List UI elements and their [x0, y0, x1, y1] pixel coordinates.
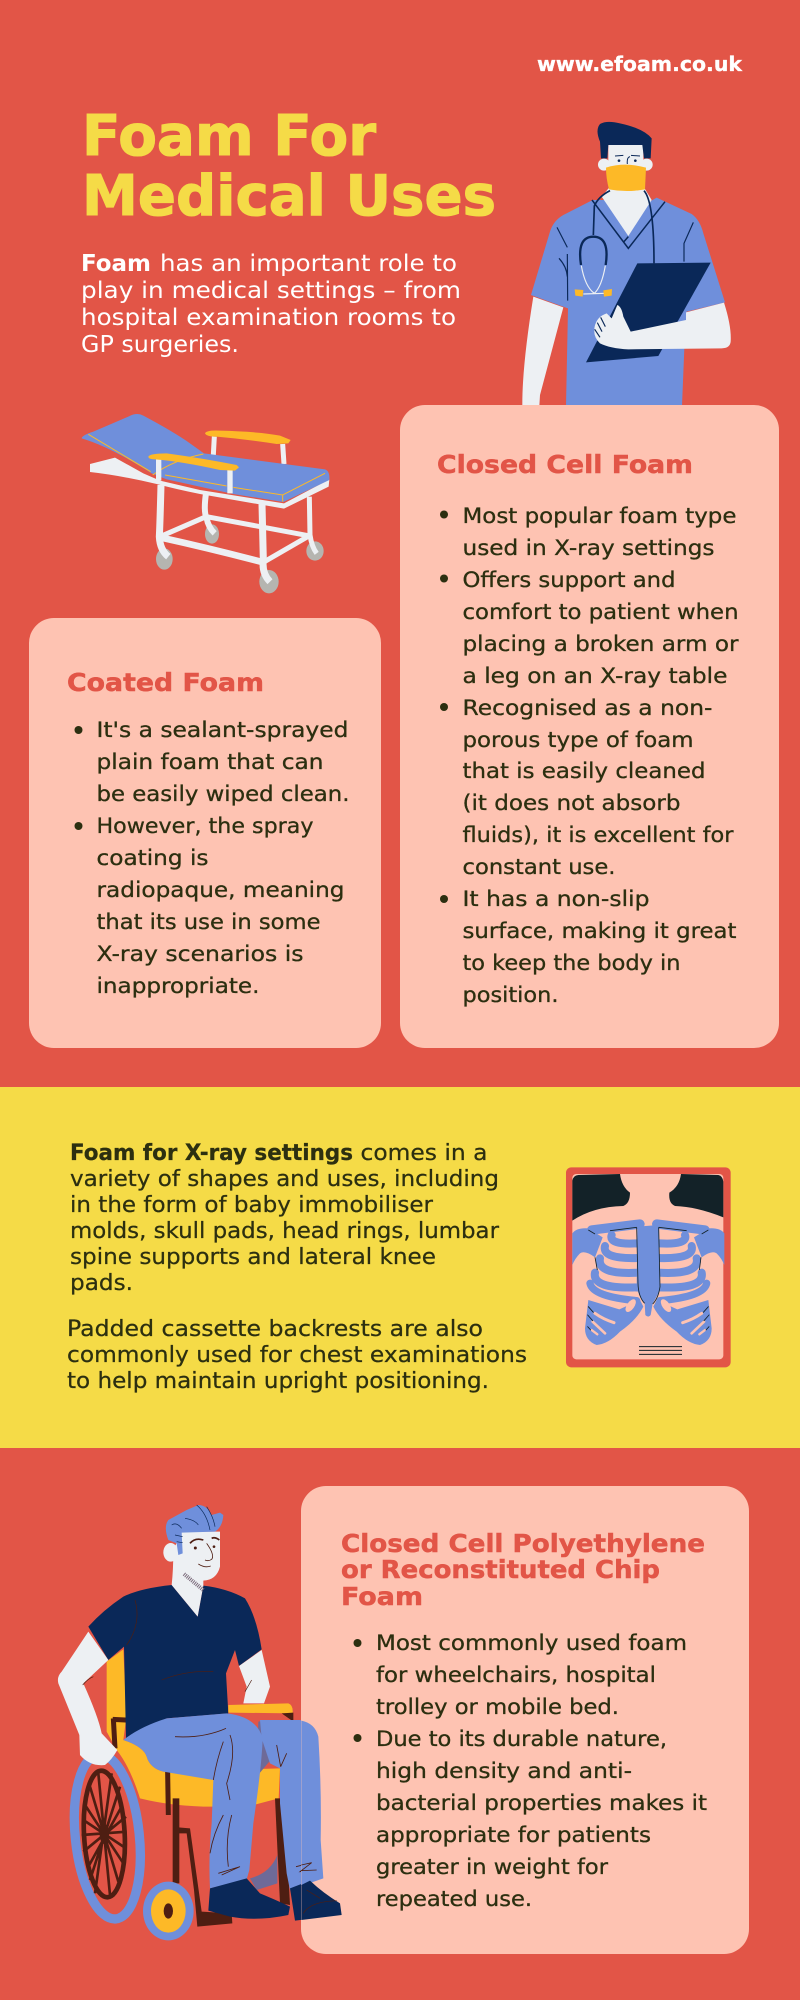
bullet list: polyethylene foam: for wheelchairs, hospital: [376, 1663, 656, 1687]
bullet list: polyethylene foam: bacterial properties makes it: [376, 1791, 707, 1815]
bullet list: polyethylene foam: repeated use.: [376, 1887, 532, 1911]
text: foam for x-ray settings: comes in a: [360, 1141, 488, 1166]
bullet list: closed cell foam: comfort to patient when: [462, 600, 738, 624]
icon: hospital trolley bed: [82, 414, 329, 593]
icon: doctor with clipboard: [522, 122, 731, 406]
intro text: [81, 251, 461, 358]
bullet list: closed cell foam: (it does not absorb: [462, 791, 680, 815]
intro text: play in medical settings – from: [81, 278, 461, 304]
bullet list: coated foam: radiopaque, meaning: [96, 878, 344, 902]
text: padded cassette backrests: commonly used for chest examinations: [67, 1343, 527, 1368]
text: foam for x-ray settings: pads.: [70, 1271, 133, 1296]
bullet list: closed cell foam: Most popular foam type: [462, 504, 736, 528]
text: foam for x-ray settings: Foam for X-ray settings: [70, 1141, 353, 1166]
bullet list: coated foam: It's a sealant-sprayed: [96, 718, 348, 742]
title: Foam For: [82, 104, 376, 169]
text: padded cassette backrests: [67, 1317, 527, 1394]
intro text: has an important role to: [160, 251, 457, 277]
panel: closed cell foam: [400, 405, 779, 1048]
bullet list: closed cell foam: position.: [462, 983, 558, 1007]
heading: closed cell foam: Closed Cell Foam: [437, 450, 693, 479]
text: foam for x-ray settings: in the form of baby immobiliser: [70, 1193, 434, 1218]
heading: coated foam: Coated Foam: [67, 668, 264, 697]
bullet list: closed cell foam: Offers support and: [462, 568, 676, 592]
bullet list: closed cell foam: constant use.: [462, 855, 616, 879]
icon: man in wheelchair: [58, 1505, 342, 1940]
title: Medical Uses: [82, 164, 496, 229]
bullet list: polyethylene foam: appropriate for patients: [376, 1823, 651, 1847]
title: [82, 104, 496, 229]
heading: closed cell polyethylene or reconstituted chip foam: or Reconstituted Chip: [341, 1555, 660, 1584]
text: foam for x-ray settings: molds, skull pads, head rings, lumbar: [70, 1219, 500, 1244]
icon: wheelchair user foot overlapping panel: [301, 1721, 342, 1920]
heading: closed cell polyethylene or reconstituted chip foam: Foam: [341, 1582, 423, 1611]
heading: closed cell polyethylene or reconstituted chip foam: [341, 1529, 705, 1611]
bullet list: polyethylene foam: trolley or mobile bed.: [376, 1695, 619, 1719]
bullet list: closed cell foam: a leg on an X-ray table: [462, 664, 728, 688]
bullet list: closed cell foam: that is easily cleaned: [462, 759, 706, 783]
bullet list: coated foam: be easily wiped clean.: [96, 782, 350, 806]
intro text: Foam: [81, 251, 151, 277]
bullet list: polyethylene foam: [354, 1631, 707, 1911]
intro text: hospital examination rooms to: [81, 305, 456, 331]
bullet list: closed cell foam: Recognised as a non-: [462, 696, 712, 720]
bullet list: coated foam: plain foam that can: [96, 750, 324, 774]
bullet list: closed cell foam: surface, making it great: [462, 919, 736, 943]
bullet list: coated foam: X-ray scenarios is: [96, 942, 304, 966]
bullet list: closed cell foam: used in X-ray settings: [462, 536, 714, 560]
bullet list: closed cell foam: to keep the body in: [462, 951, 680, 975]
bullet list: polyethylene foam: Due to its durable nature,: [376, 1727, 667, 1751]
bullet list: coated foam: [74, 718, 350, 998]
bullet list: coated foam: coating is: [96, 846, 208, 870]
panel: closed cell polyethylene foam: [301, 1486, 749, 1954]
website url: www.efoam.co.uk: [537, 52, 743, 76]
bullet list: closed cell foam: placing a broken arm or: [462, 632, 739, 656]
heading: closed cell polyethylene or reconstituted chip foam: Closed Cell Polyethylene: [341, 1529, 705, 1558]
text: padded cassette backrests: to help maintain upright positioning.: [67, 1369, 489, 1394]
bullet list: closed cell foam: fluids), it is excellent for: [462, 823, 734, 847]
bullet list: closed cell foam: [440, 504, 739, 1007]
bullet list: polyethylene foam: Most commonly used foam: [376, 1631, 687, 1655]
bullet list: closed cell foam: porous type of foam: [462, 728, 694, 752]
text: foam for x-ray settings: spine supports and lateral knee: [70, 1245, 436, 1270]
bullet list: polyethylene foam: greater in weight for: [376, 1855, 608, 1879]
icon: chest x-ray: [566, 1167, 731, 1367]
bullet list: closed cell foam: It has a non-slip: [462, 887, 650, 911]
panel: x-ray settings band: [0, 1087, 800, 1448]
text: padded cassette backrests: Padded cassette backrests are also: [67, 1317, 483, 1342]
bullet list: coated foam: However, the spray: [96, 814, 314, 838]
intro text: GP surgeries.: [81, 332, 239, 358]
bullet list: coated foam: inappropriate.: [96, 974, 260, 998]
panel: coated foam: [29, 618, 381, 1048]
text: foam for x-ray settings: [70, 1141, 500, 1296]
bullet list: coated foam: that its use in some: [96, 910, 320, 934]
text: foam for x-ray settings: variety of shapes and uses, including: [70, 1167, 499, 1192]
bullet list: polyethylene foam: high density and anti-: [376, 1759, 632, 1783]
